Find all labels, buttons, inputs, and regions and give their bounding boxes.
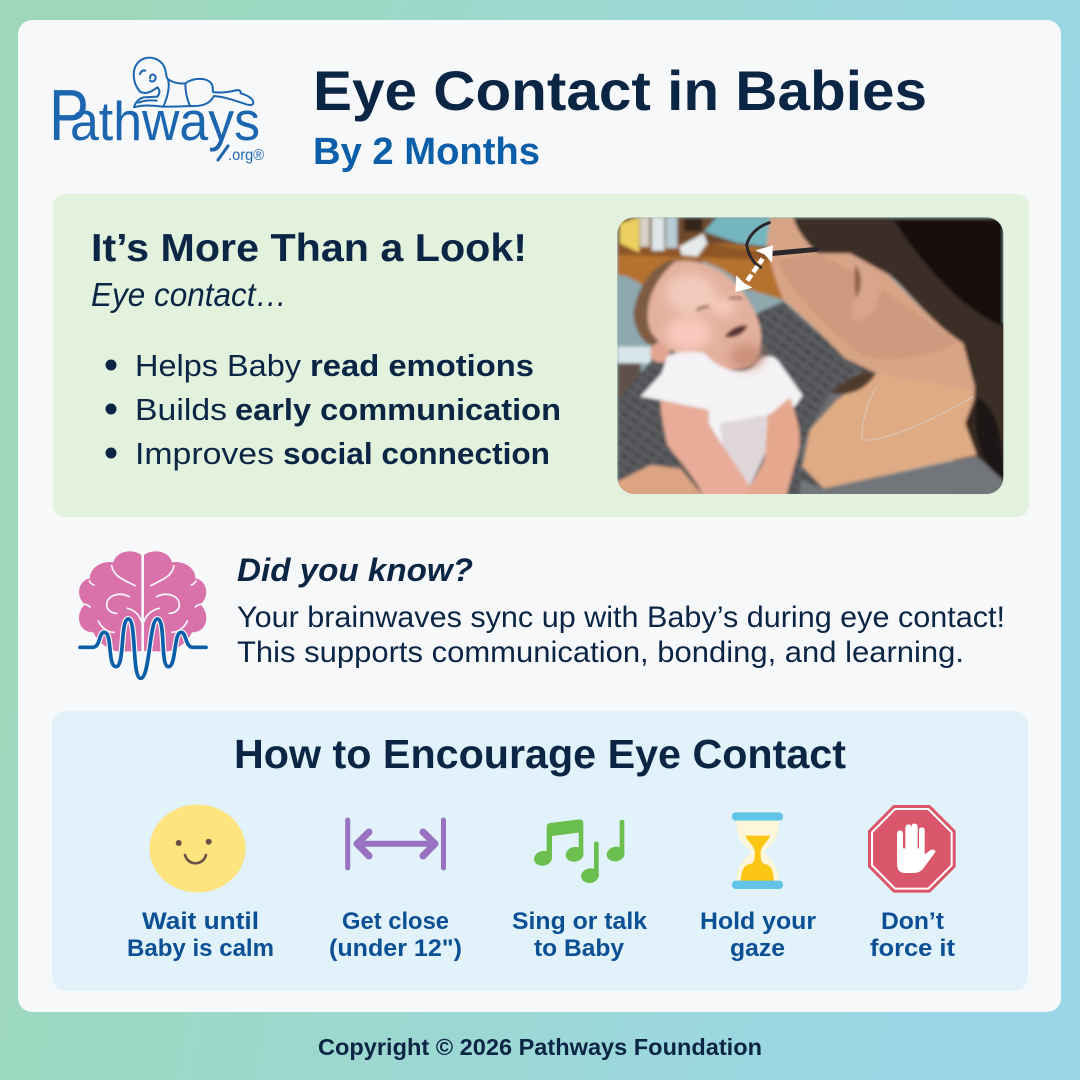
wall xyxy=(617,217,1004,484)
brain shape xyxy=(79,551,206,652)
label: get close: (under 12") xyxy=(329,935,462,962)
baby's hair xyxy=(633,259,703,347)
glasses xyxy=(747,223,817,267)
icon: music notes xyxy=(533,819,626,885)
logo suffix: .org® xyxy=(228,147,264,164)
label: sing or talk: Sing or talk xyxy=(512,908,648,935)
ear xyxy=(853,277,880,320)
baby's arms xyxy=(660,400,750,497)
panel heading: How to Encourage Eye Contact xyxy=(234,731,846,777)
baby's bodysuit xyxy=(638,350,805,447)
panel: how to encourage eye contact xyxy=(52,711,1028,991)
hair behind neck xyxy=(953,322,1004,485)
logo: Pathways.org xyxy=(49,58,264,164)
sweater xyxy=(617,302,883,497)
brainwave xyxy=(80,619,206,678)
bullet list: Improves xyxy=(135,436,274,471)
bullet list: early communication xyxy=(235,392,561,427)
did you know body line 1: Your brainwaves sync up with Baby’s during eye contact! xyxy=(237,601,1005,634)
panel subheading: Eye contact… xyxy=(91,276,287,313)
label: hold your gaze xyxy=(700,908,816,962)
bullet list: Helps Baby xyxy=(135,348,302,383)
copyright footer: Copyright © 2026 Pathways Foundation xyxy=(318,1034,762,1060)
bullet list: social connection xyxy=(283,436,550,471)
hair xyxy=(793,217,1003,480)
label: get close xyxy=(329,908,462,962)
label: sing or talk xyxy=(512,908,648,962)
bullet list: Builds xyxy=(135,392,227,427)
baby's facial features xyxy=(697,298,747,337)
brain folds xyxy=(84,566,201,632)
label: hold your gaze: gaze xyxy=(730,935,785,962)
label: sing or talk: to Baby xyxy=(534,935,625,962)
label: wait until calm xyxy=(127,908,274,962)
icon: distance arrow xyxy=(348,820,444,868)
mother's chest and neck xyxy=(764,217,978,422)
shelf top xyxy=(617,217,769,250)
did you know body line 2: This supports communication, bonding, and learning. xyxy=(237,636,964,669)
logo wordmark: athways xyxy=(70,90,260,152)
did you know text xyxy=(237,552,1005,669)
logo baby illustration xyxy=(134,58,253,107)
bullet list xyxy=(106,348,561,471)
icon: smiling face xyxy=(150,804,246,892)
panel heading: It’s More Than a Look! xyxy=(91,227,527,270)
brain icon xyxy=(79,551,206,678)
eye contact double arrow xyxy=(735,245,773,292)
label: don't force it xyxy=(870,908,955,962)
neckline shirt xyxy=(800,456,1003,497)
label: get close: Get close xyxy=(342,908,449,935)
bullet list: read emotions xyxy=(310,348,534,383)
label: don't force it: Don’t xyxy=(881,908,944,935)
logo wordmark: P xyxy=(49,76,89,156)
panel: more than a look xyxy=(53,194,1029,517)
shelf wood xyxy=(617,243,783,300)
label: wait until calm: Baby is calm xyxy=(127,935,274,962)
did you know heading: Did you know? xyxy=(237,552,473,588)
baby's face highlights xyxy=(665,273,763,368)
label: don't force it: force it xyxy=(870,935,955,962)
icon: stop sign with hand xyxy=(868,805,956,893)
subtitle: By 2 Months xyxy=(313,131,540,173)
photo: mother and baby eye contact xyxy=(610,210,1010,500)
label: hold your gaze: Hold your xyxy=(700,908,816,935)
icon: hourglass xyxy=(732,812,783,889)
baby's head xyxy=(648,261,761,370)
necklace xyxy=(862,387,973,440)
label: wait until calm: Wait until xyxy=(142,908,259,935)
title: Eye Contact in Babies xyxy=(313,59,927,122)
